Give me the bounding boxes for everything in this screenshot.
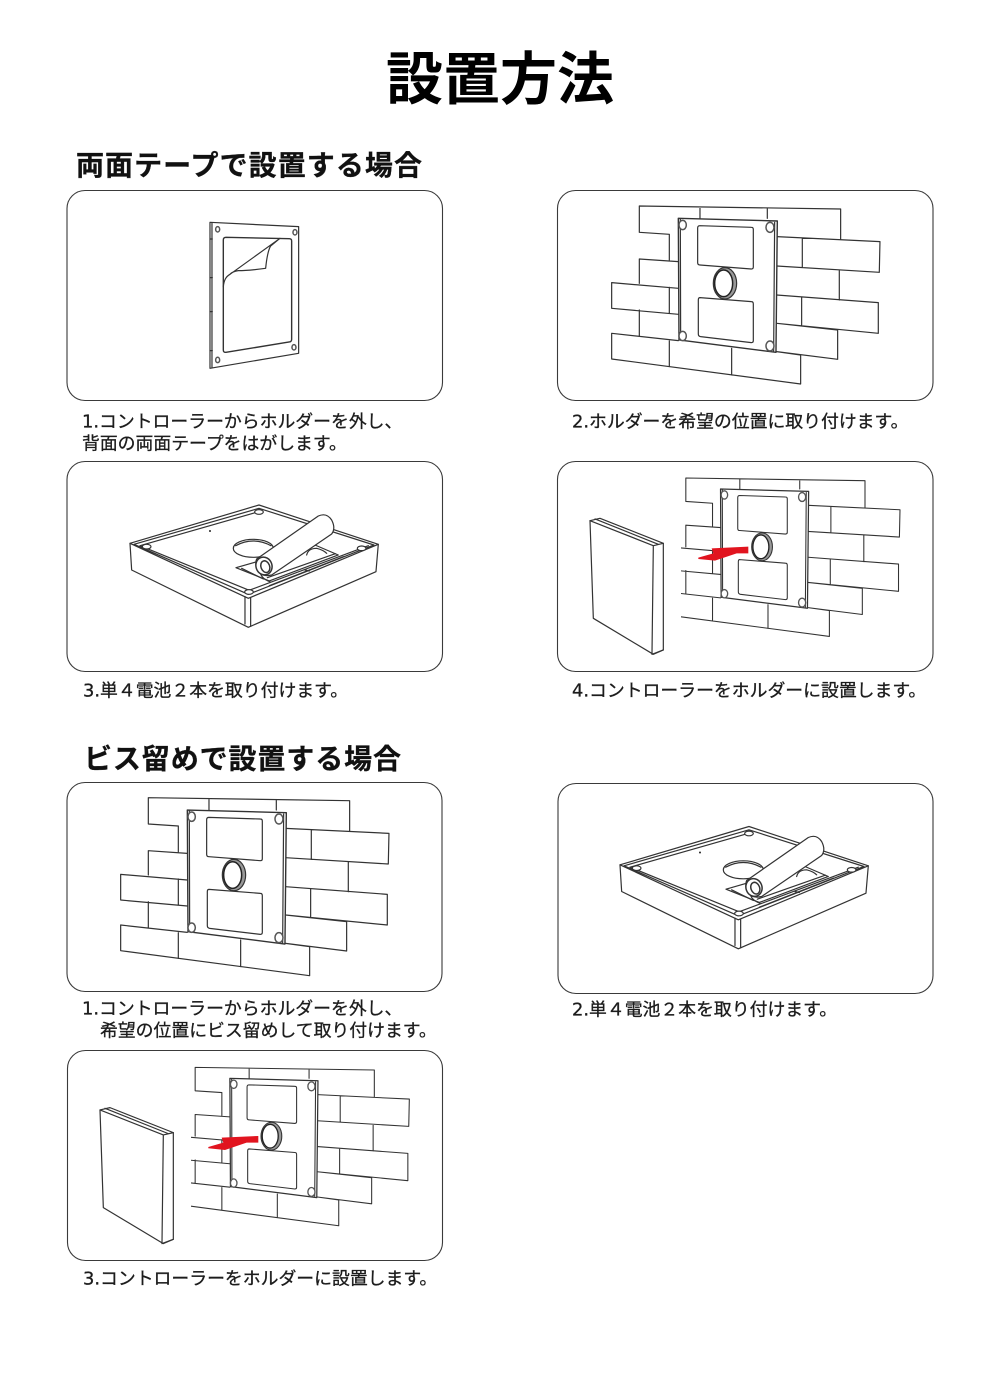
panel: tape step 3 [67, 462, 442, 672]
heading: double-sided tape: 両面テープで設置する場合 [76, 150, 422, 181]
illustration: battery insertion [620, 826, 868, 949]
caption: screw step 1: 希望の位置にビス留めして取り付けます。 [100, 1020, 437, 1042]
panel: tape step 4 [558, 462, 933, 672]
panel: screw step 1 [67, 782, 442, 992]
panel: screw step 3 [68, 1050, 442, 1260]
illustration: holder on wall [121, 798, 389, 976]
caption: screw step 1: 1.コントローラーからホルダーを外し、 [82, 998, 402, 1020]
illustration: holder on wall [612, 206, 880, 384]
illustration: battery insertion [130, 505, 378, 627]
panel: screw step 2 [558, 784, 933, 994]
title: 設置方法 [386, 48, 614, 112]
heading: screws: ビス留めで設置する場合 [84, 744, 401, 774]
illustration: controller onto holder [590, 478, 900, 654]
panel: tape step 1 [67, 190, 442, 400]
caption: screw step 3: 3.コントローラーをホルダーに設置します。 [83, 1268, 437, 1290]
caption: tape step 1: 背面の両面テープをはがします。 [82, 434, 347, 454]
panel: tape step 2 [558, 190, 933, 400]
caption: tape step 1: 1.コントローラーからホルダーを外し、 [82, 412, 402, 432]
caption: tape step 2: 2.ホルダーを希望の位置に取り付けます。 [572, 412, 908, 432]
caption: tape step 1 [82, 412, 402, 454]
illustration: controller onto holder [100, 1067, 409, 1244]
illustration: holder peel tape [210, 222, 299, 368]
caption: tape step 4: 4.コントローラーをホルダーに設置します。 [572, 680, 926, 702]
caption: screw step 2: 2.単４電池２本を取り付けます。 [572, 1000, 837, 1020]
caption: tape step 3: 3.単４電池２本を取り付けます。 [83, 680, 348, 702]
caption: screw step 1 [82, 998, 437, 1042]
